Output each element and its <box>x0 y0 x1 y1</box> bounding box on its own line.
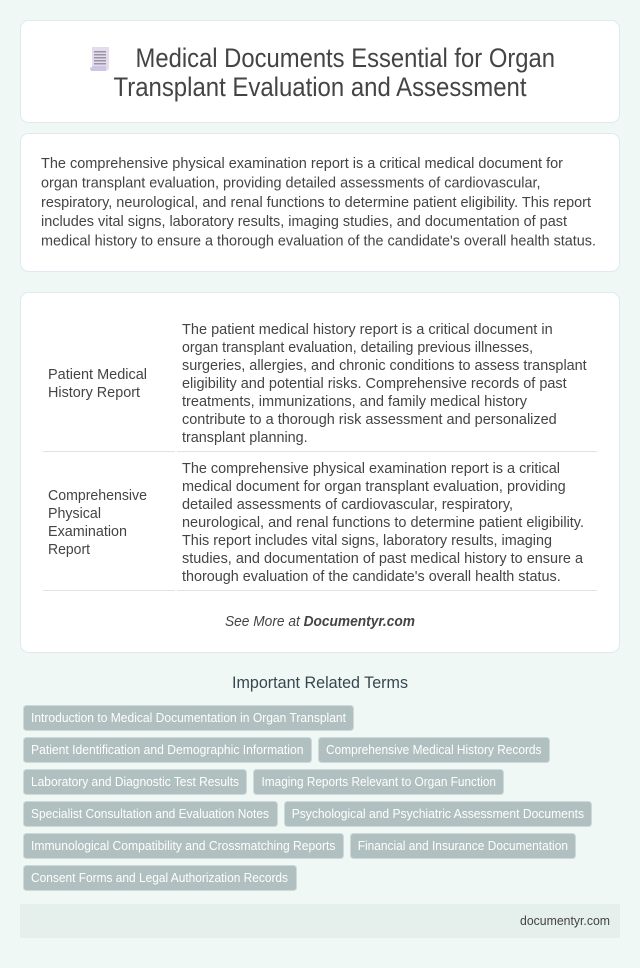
tag <box>24 738 312 762</box>
tag <box>350 834 576 858</box>
row text: comprehensive physical examination report: medical document for organ transplant evaluation, providing <box>182 479 566 495</box>
row text: patient medical history report: organ transplant evaluation, detailing previous illnesses, <box>182 340 533 356</box>
row text: comprehensive physical examination report: studies, and documentation of past medical history to ensure a <box>182 551 584 567</box>
panel: document table <box>20 292 620 652</box>
row text: comprehensive physical examination report: thorough evaluation of the candidate's overall health status. <box>182 569 561 585</box>
footer site name: documentyr.com <box>520 914 610 928</box>
header panel <box>20 20 620 122</box>
row text: comprehensive physical examination report: The comprehensive physical examination report is a critical <box>182 461 560 477</box>
row text: comprehensive physical examination report: neurological, and renal functions to determine patient eligibility. <box>182 515 584 531</box>
row text: patient medical history report: eligibility and potential risks. Comprehensive records of past <box>182 376 567 392</box>
panel: introduction <box>20 134 620 272</box>
tag: Comprehensive Medical History Records <box>326 743 542 757</box>
row label: comprehensive physical examination report: Report <box>48 542 90 558</box>
tag <box>254 770 504 794</box>
tag: Immunological Compatibility and Crossmatching Reports <box>31 839 336 853</box>
row label: comprehensive physical examination report: Comprehensive <box>48 488 147 504</box>
row text: patient medical history report: transplant planning. <box>182 430 308 446</box>
tag <box>24 802 278 826</box>
footer <box>20 904 620 938</box>
tag: Imaging Reports Relevant to Organ Function <box>262 775 496 789</box>
row text: patient medical history report: The patient medical history report is a critical document in <box>182 322 553 338</box>
row label: patient medical history report: Patient Medical <box>48 367 147 383</box>
intro text block: organ transplant evaluation, providing detailed assessments of cardiovascular, <box>41 176 540 192</box>
tag <box>318 738 550 762</box>
tag: Specialist Consultation and Evaluation Notes <box>31 807 269 821</box>
related terms tags <box>24 706 592 890</box>
intro text block <box>41 156 596 250</box>
row text: patient medical history report: surgeries, allergies, and chronic conditions to assess transplant <box>182 358 587 374</box>
title: Transplant Evaluation and Assessment <box>114 72 527 102</box>
heading: important related terms: Important Related Terms <box>232 674 408 692</box>
row text: patient medical history report <box>182 322 587 446</box>
tag: Consent Forms and Legal Authorization Records <box>31 871 288 885</box>
tag <box>24 866 296 890</box>
intro text block: includes vital signs, laboratory results, imaging studies, and documentation of past <box>41 214 567 230</box>
intro text block: medical history to ensure a thorough evaluation of the candidate's overall health status. <box>41 234 596 250</box>
tag <box>284 802 592 826</box>
tag: Financial and Insurance Documentation <box>358 839 568 853</box>
tag <box>24 834 344 858</box>
title <box>114 43 555 102</box>
tag: Introduction to Medical Documentation in Organ Transplant <box>31 711 346 725</box>
row label: patient medical history report: History Report <box>48 385 140 401</box>
row label: comprehensive physical examination report <box>48 488 147 558</box>
row label: patient medical history report <box>48 367 147 401</box>
row label: comprehensive physical examination report: Examination <box>48 524 127 540</box>
icon: document scroll <box>90 47 109 71</box>
tag <box>24 706 354 730</box>
row text: comprehensive physical examination report <box>182 461 584 585</box>
row label: comprehensive physical examination report: Physical <box>48 506 101 522</box>
tag: Psychological and Psychiatric Assessment Documents <box>292 807 584 821</box>
intro text block: respiratory, neurological, and renal functions to determine patient eligibility. This report <box>41 195 591 211</box>
row text: comprehensive physical examination report: This report includes vital signs, laboratory results, imaging <box>182 533 552 549</box>
tag: Laboratory and Diagnostic Test Results <box>31 775 239 789</box>
tag <box>24 770 246 794</box>
row text: patient medical history report: contribute to a thorough risk assessment and personalized <box>182 412 557 428</box>
title: Medical Documents Essential for Organ <box>136 43 555 73</box>
row text: patient medical history report: treatments, immunizations, and family medical history <box>182 394 528 410</box>
see more link: See More at Documentyr.com <box>225 614 415 630</box>
row text: comprehensive physical examination report: detailed assessments of cardiovascular, respiratory, <box>182 497 513 513</box>
tag: Patient Identification and Demographic Information <box>31 743 304 757</box>
intro text block: The comprehensive physical examination report is a critical medical document for <box>41 156 563 172</box>
